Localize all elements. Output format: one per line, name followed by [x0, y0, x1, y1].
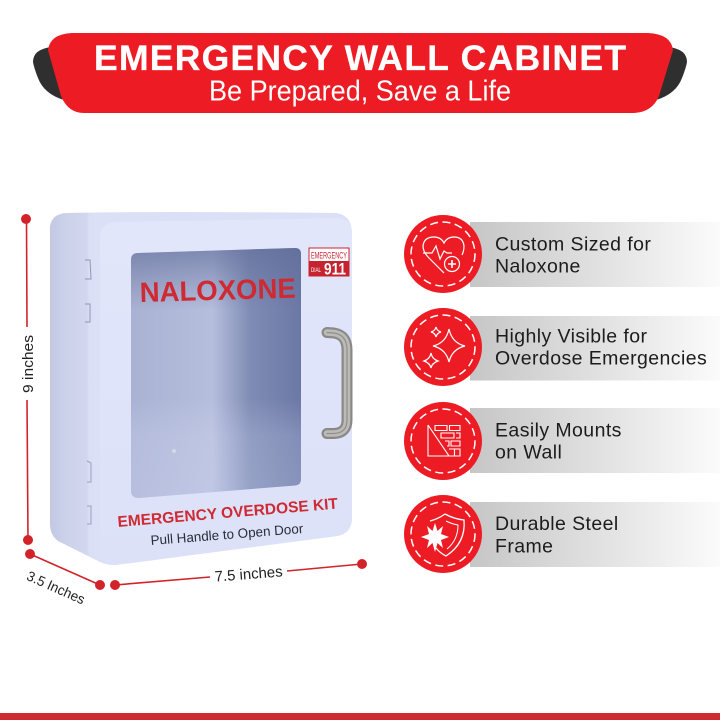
feature text: Durable Steel — [495, 513, 619, 535]
feature text: on Wall — [495, 442, 562, 464]
feature bar — [470, 502, 720, 567]
feature text: Easily Mounts — [495, 420, 622, 442]
banner dark right tab — [656, 47, 687, 100]
feature text: Naloxone — [495, 256, 581, 278]
icon: brick wall — [428, 425, 460, 456]
feature: highly visible — [404, 308, 720, 386]
naloxone label: NALOXONE — [139, 273, 296, 308]
badge — [404, 215, 482, 293]
height dimension — [21, 214, 37, 545]
badge — [404, 402, 482, 480]
hinge bottom — [87, 461, 91, 524]
feature: durable steel — [404, 495, 720, 573]
icon: shield with burst — [421, 514, 464, 556]
emergency 911 sticker: 911 — [324, 260, 346, 278]
subtitle: Be Prepared, Save a Life — [209, 76, 511, 108]
feature text: Overdose Emergencies — [495, 348, 707, 370]
feature: custom sized — [404, 215, 720, 293]
badge — [404, 308, 482, 386]
title: EMERGENCY WALL CABINET — [94, 38, 626, 78]
feature text: Highly Visible for — [495, 326, 648, 348]
handle instruction: Pull Handle to Open Door — [150, 521, 304, 548]
kit label: EMERGENCY OVERDOSE KIT — [117, 496, 339, 531]
hinge top — [85, 260, 91, 322]
badge — [404, 495, 482, 573]
cabinet front face — [100, 218, 352, 565]
emergency 911 sticker: EMERGENCY — [311, 250, 347, 260]
feature bar — [470, 408, 720, 473]
icon: sparkles — [424, 327, 465, 368]
depth dimension — [24, 549, 105, 607]
cabinet side — [50, 212, 352, 565]
door handle — [327, 332, 347, 434]
feature: easily mounts — [404, 402, 720, 480]
width dimension — [110, 559, 367, 590]
height dimension: 9 inches — [21, 335, 37, 393]
feature text: Custom Sized for — [495, 234, 651, 256]
depth dimension: 3.5 Inches — [24, 568, 88, 607]
bottom bar — [0, 713, 720, 720]
feature text: Frame — [495, 536, 553, 558]
feature bar — [470, 222, 720, 287]
icon: heart — [423, 237, 464, 273]
cabinet illustration — [50, 212, 352, 565]
banner red ribbon — [48, 33, 673, 113]
emergency 911 sticker: DIAL — [311, 268, 321, 274]
header banner — [33, 33, 687, 113]
emergency 911 sticker — [309, 248, 349, 278]
window — [131, 248, 301, 498]
feature bar — [470, 316, 720, 380]
width dimension: 7.5 inches — [214, 563, 283, 586]
banner dark left tab — [33, 47, 64, 100]
